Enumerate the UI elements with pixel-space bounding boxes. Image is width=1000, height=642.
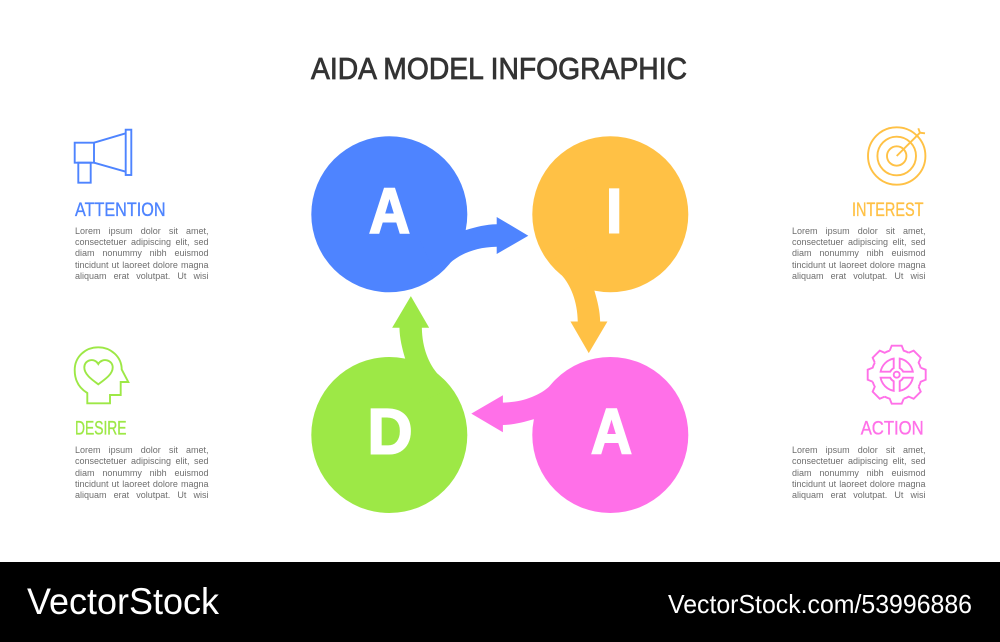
text block: desire: diam nonummy nibh euismod	[75, 468, 208, 478]
text block: desire	[75, 445, 208, 500]
circle and arrow: action: A	[591, 396, 632, 468]
panel: desire	[74, 346, 208, 500]
text block: attention: diam nonummy nibh euismod	[75, 248, 208, 258]
text block: attention: aliquam erat volutpat. Ut wisi	[75, 271, 208, 281]
footer logo: VectorStock	[27, 580, 219, 622]
icon: target with arrow	[868, 127, 925, 185]
text block: action: Lorem ipsum dolor sit amet,	[792, 445, 926, 455]
chart: AIDA cycle	[311, 136, 688, 513]
text block: interest: diam nonummy nibh euismod	[792, 248, 926, 258]
circle and arrow: attention	[311, 136, 528, 292]
text block: interest	[792, 226, 926, 281]
text block: attention: Lorem ipsum dolor sit amet,	[75, 226, 208, 236]
panel: attention	[74, 128, 208, 281]
text block: action	[792, 445, 926, 500]
panel: interest	[792, 126, 926, 281]
text block: desire: aliquam erat volutpat. Ut wisi	[75, 490, 208, 500]
heading: action: ACTION	[861, 418, 924, 440]
footer bar	[0, 562, 1000, 642]
text block: attention	[75, 226, 208, 281]
heading: desire: DESIRE	[75, 418, 127, 440]
circle and arrow: interest	[532, 136, 688, 353]
heading: attention: ATTENTION	[75, 199, 166, 221]
text block: interest: Lorem ipsum dolor sit amet,	[792, 226, 926, 236]
icon: megaphone	[75, 130, 131, 183]
circle and arrow: action	[471, 357, 688, 513]
text block: desire: tincidunt ut laoreet dolore magna	[75, 479, 208, 489]
footer url: VectorStock.com/53996886	[668, 591, 972, 619]
circle and arrow: desire	[311, 296, 467, 513]
text block: interest: aliquam erat volutpat. Ut wisi	[792, 271, 926, 281]
circle and arrow: interest: I	[605, 175, 623, 247]
text block: desire: Lorem ipsum dolor sit amet,	[75, 445, 208, 455]
text block: interest: consectetuer adipiscing elit, sed	[792, 237, 926, 247]
icon: gear	[868, 346, 926, 404]
icon: head with heart	[75, 347, 128, 403]
circle and arrow: attention: A	[369, 175, 410, 247]
text block: attention: tincidunt ut laoreet dolore magna	[75, 260, 208, 270]
circle and arrow: desire: D	[368, 396, 412, 468]
text block: attention: consectetuer adipiscing elit, sed	[75, 237, 208, 247]
text block: interest: tincidunt ut laoreet dolore magna	[792, 260, 926, 270]
text block: desire: consectetuer adipiscing elit, sed	[75, 456, 208, 466]
text block: action: diam nonummy nibh euismod	[792, 468, 926, 478]
text block: action: aliquam erat volutpat. Ut wisi	[792, 490, 926, 500]
panel: action	[792, 344, 927, 500]
heading: interest: INTEREST	[852, 199, 924, 221]
text block: action: tincidunt ut laoreet dolore magna	[792, 479, 926, 489]
text block: action: consectetuer adipiscing elit, sed	[792, 456, 926, 466]
